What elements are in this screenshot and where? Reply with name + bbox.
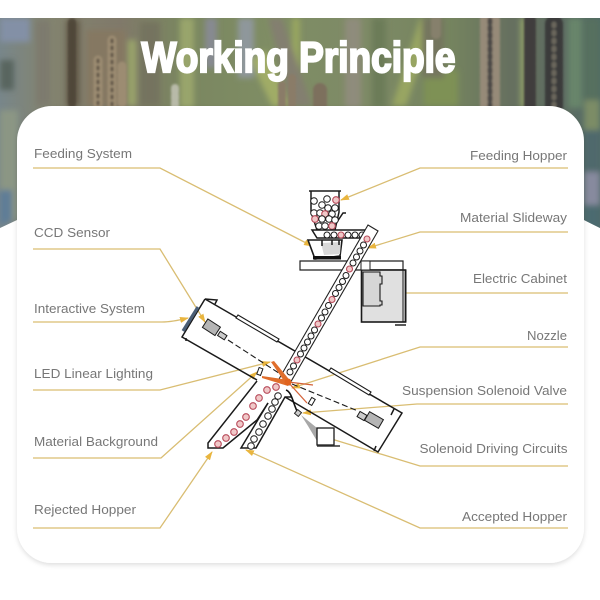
right label: Suspension Solenoid Valve xyxy=(303,383,568,413)
right label: Accepted Hopper: Accepted Hopper xyxy=(462,509,568,524)
title: Working Principle xyxy=(142,34,456,82)
right camera xyxy=(357,411,383,428)
optical path dashed lines xyxy=(228,340,358,411)
right label: Nozzle xyxy=(292,328,568,388)
left label: Material Background xyxy=(33,372,257,458)
left label: CCD Sensor: CCD Sensor xyxy=(34,225,111,240)
solenoid driving circuits xyxy=(301,415,340,446)
left label: Interactive System: Interactive System xyxy=(34,301,145,316)
right label: Electric Cabinet: Electric Cabinet xyxy=(473,271,567,286)
feeding system vibrator xyxy=(308,240,342,260)
left label: Feeding System xyxy=(33,146,312,246)
right label: Suspension Solenoid Valve: Suspension Solenoid Valve xyxy=(402,383,567,398)
feeding tray with grains xyxy=(312,230,367,238)
platform xyxy=(300,261,403,270)
CCD sensor left camera xyxy=(202,319,227,340)
interactive system blue plate xyxy=(183,307,198,331)
right label: Material Slideway: Material Slideway xyxy=(460,210,568,225)
right label: Nozzle: Nozzle xyxy=(527,328,567,343)
left label: LED Linear Lighting xyxy=(33,362,270,390)
right label: Solenoid Driving Circuits: Solenoid Driving Circuits xyxy=(420,441,568,456)
nozzle orange light rays xyxy=(262,361,313,403)
right label: Accepted Hopper xyxy=(246,450,568,528)
left label: Rejected Hopper: Rejected Hopper xyxy=(34,502,137,517)
suspension solenoid valve xyxy=(286,390,302,417)
right label: Solenoid Driving Circuits xyxy=(325,437,568,466)
sorting chamber housing xyxy=(182,299,402,452)
rejected hopper with grains xyxy=(208,381,279,448)
left label: Feeding System: Feeding System xyxy=(34,146,132,161)
feeding hopper with grains xyxy=(309,191,346,230)
accepted hopper with grains xyxy=(241,393,292,449)
left label: Interactive System xyxy=(33,301,188,322)
background photo: wheat field banner xyxy=(0,18,600,230)
left label: Rejected Hopper xyxy=(33,452,212,528)
electric cabinet xyxy=(361,261,406,325)
left label: Material Background: Material Background xyxy=(34,434,158,449)
right label: Material Slideway xyxy=(368,210,568,248)
right label: Feeding Hopper: Feeding Hopper xyxy=(470,148,568,163)
diagram: sorting machine xyxy=(182,191,406,452)
right label: Feeding Hopper xyxy=(341,148,568,200)
material slideway chute with grains xyxy=(279,225,378,385)
left label: CCD Sensor xyxy=(33,225,205,322)
LED linear lights xyxy=(257,367,315,405)
panel: white rounded card xyxy=(17,106,584,563)
left label: LED Linear Lighting: LED Linear Lighting xyxy=(34,366,153,381)
